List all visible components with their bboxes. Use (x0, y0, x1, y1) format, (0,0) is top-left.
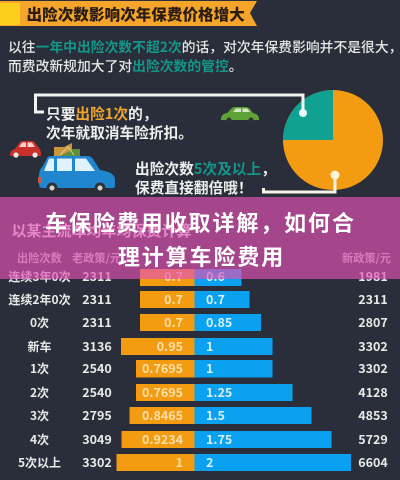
pie chart (283, 90, 383, 190)
row: 1次: 2540 (82, 358, 112, 377)
icon: green car (221, 107, 259, 122)
row: 5次以上: 1 (176, 452, 183, 471)
row: 4次: 1.75 (206, 429, 232, 448)
page title: 理计算车险费用 (118, 240, 285, 272)
row: 新车: 1 (206, 336, 213, 355)
luggage (54, 143, 80, 157)
intro paragraph: 以往一年中出险次数不超2次的话，对次年保费影响并不是很大， (8, 36, 400, 56)
row: 新车: 0.95 (157, 336, 183, 355)
row: 5次以上: 2 (206, 452, 213, 471)
row: 连续2年0次: 2311 (358, 289, 388, 308)
row: 连续3年0次: 1981 (358, 266, 388, 285)
row: 0次: 0.7 (164, 312, 183, 331)
row: 1次: 0.7695 (142, 358, 183, 377)
callout: five or more claims (135, 158, 276, 198)
row: 2次: 2540 (82, 382, 112, 401)
table heading behind band: 以某主流车均年均保费计算 (12, 220, 192, 241)
callout: one claim: 只要出险1次的， (46, 103, 158, 124)
callout: five or more claims: 保费直接翻倍哦！ (135, 177, 253, 198)
connector: one claim (36, 95, 307, 117)
row: 连续3年0次: 0.7 (164, 266, 183, 285)
row: 4次: 5729 (358, 429, 388, 448)
icon: blue car with luggage (38, 143, 115, 194)
row: 4次 (30, 429, 388, 448)
row: 0次: 2807 (358, 312, 388, 331)
page title: 车保险费用收取详解，如何合 (45, 206, 356, 238)
bar chart table (8, 266, 388, 471)
row: 连续2年0次: 连续2年0次 (8, 291, 71, 308)
row: 2次 (30, 382, 388, 401)
row: 连续2年0次: 2311 (82, 289, 112, 308)
callout: five or more claims: 出险次数5次及以上， (135, 158, 276, 179)
row: 4次: 0.9234 (142, 429, 184, 448)
row: 3次 (30, 405, 388, 424)
intro paragraph: 而费改新规加大了对出险次数的管控。 (8, 55, 243, 75)
row: 1次 (30, 358, 388, 378)
row: 3次: 4853 (358, 405, 388, 424)
row: 3次: 1.5 (206, 405, 225, 424)
ribbon title: 出险次数影响次年保费价格增大 (26, 3, 245, 25)
row: 2次: 2次 (30, 384, 49, 401)
row: 2次: 4128 (358, 382, 388, 401)
row: 3次: 0.8465 (142, 405, 183, 424)
purple title band (0, 197, 400, 279)
row: 新车: 新车 (27, 338, 52, 355)
row: 3次: 3次 (30, 407, 49, 424)
row: 连续3年0次: 2311 (82, 266, 112, 285)
icon: red car (10, 141, 41, 158)
table heading behind band (12, 220, 391, 266)
row: 0次 (30, 312, 388, 331)
row: 5次以上: 3302 (82, 452, 112, 471)
row: 1次: 3302 (358, 358, 388, 377)
row: 4次: 4次 (30, 431, 49, 448)
row: 连续3年0次 (8, 266, 388, 286)
header ribbon (0, 1, 257, 26)
row: 0次: 2311 (82, 312, 112, 331)
row: 连续3年0次: 连续3年0次 (8, 268, 71, 285)
table heading behind band: 老政策/元 (72, 250, 121, 266)
row: 连续3年0次: 0.6 (206, 266, 225, 285)
row: 5次以上: 6604 (358, 452, 388, 471)
row: 新车: 3302 (358, 336, 388, 355)
connector: five claims (264, 170, 340, 192)
row: 连续2年0次: 0.7 (206, 289, 225, 308)
page title (45, 206, 356, 272)
row: 连续2年0次 (8, 289, 388, 308)
intro paragraph (8, 36, 400, 75)
row: 3次: 2795 (82, 405, 112, 424)
table heading behind band: 出险次数 (17, 250, 62, 266)
row: 新车: 3136 (82, 336, 112, 355)
row: 2次: 0.7695 (142, 382, 183, 401)
callout: one claim: 次年就取消车险折扣。 (46, 122, 193, 143)
table heading behind band: 新政策/元 (342, 250, 391, 266)
row: 连续2年0次: 0.7 (164, 289, 183, 308)
row: 4次: 3049 (82, 429, 112, 448)
row: 0次: 0次 (30, 314, 49, 331)
row: 5次以上 (18, 452, 388, 471)
row: 1次: 1次 (30, 360, 49, 377)
row: 2次: 1.25 (206, 382, 232, 401)
row: 0次: 0.85 (206, 312, 232, 331)
row: 1次: 1 (206, 358, 213, 377)
callout: one claim (46, 103, 193, 143)
row: 新车 (27, 336, 388, 355)
row: 5次以上: 5次以上 (18, 454, 61, 471)
